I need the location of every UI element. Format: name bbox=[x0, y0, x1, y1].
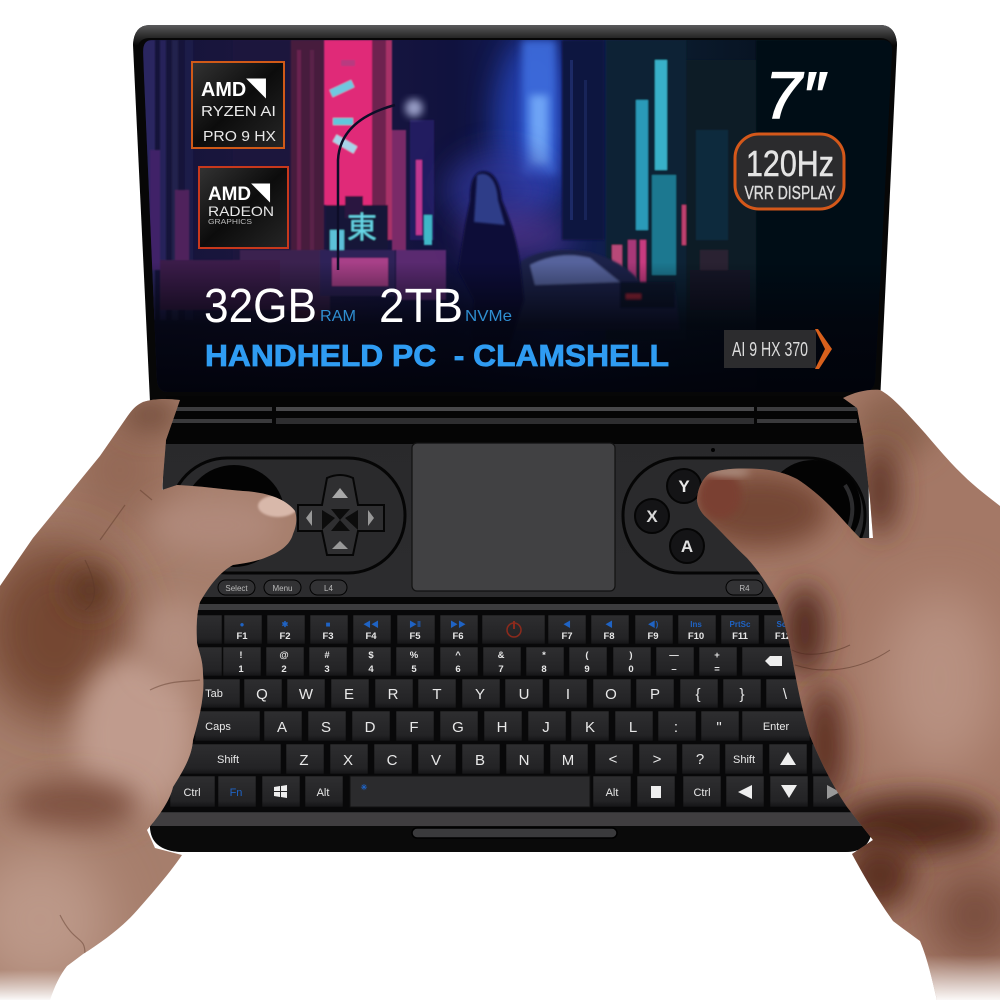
select button: Select bbox=[225, 584, 248, 593]
function key row: ● bbox=[240, 620, 245, 629]
function key row: Ins bbox=[690, 620, 702, 629]
mic holes bbox=[711, 448, 715, 452]
QWERTY key row: E bbox=[344, 686, 354, 703]
button Y: Y bbox=[678, 477, 690, 496]
number key row: 6 bbox=[455, 664, 461, 675]
AMD Ryzen AI badge: PRO 9 HX bbox=[203, 128, 276, 145]
QWERTY key row: T bbox=[432, 686, 442, 703]
ZXCV key row: Z bbox=[299, 752, 309, 769]
R4 button bbox=[726, 580, 763, 595]
screen: neon city scene bbox=[130, 30, 900, 402]
number key row: * bbox=[542, 650, 546, 661]
ASDF key row: Caps bbox=[205, 721, 231, 733]
ASDF key row: : bbox=[674, 719, 678, 736]
refresh rate badge: 120Hz bbox=[746, 143, 834, 184]
keyboard bbox=[170, 615, 851, 807]
pink neon sign tower: 東 bbox=[347, 203, 377, 247]
function key row: F2 bbox=[279, 631, 291, 642]
bottom key row: ✳ bbox=[361, 783, 368, 792]
QWERTY key row: \ bbox=[783, 686, 788, 703]
bottom key row bbox=[170, 776, 851, 807]
menu button bbox=[264, 580, 301, 595]
storage spec: NVMe bbox=[465, 308, 512, 325]
ASDF key row: F bbox=[409, 719, 419, 736]
right control area bbox=[623, 458, 865, 573]
bottom key row: Alt bbox=[606, 787, 618, 799]
bottom key row: Ctrl bbox=[693, 787, 711, 799]
QWERTY key row: U bbox=[519, 686, 529, 703]
ASDF key row: G bbox=[452, 719, 464, 736]
palm creases bbox=[792, 645, 890, 670]
menu button: Menu bbox=[272, 584, 293, 593]
number key row: @ bbox=[279, 650, 289, 661]
left buildings bbox=[143, 40, 330, 320]
QWERTY key row: O bbox=[605, 686, 617, 703]
ZXCV key row: B bbox=[475, 752, 485, 769]
screen size label: 7″ bbox=[765, 58, 828, 132]
function key row bbox=[190, 615, 802, 644]
ZXCV key row bbox=[178, 744, 842, 774]
number key row: ( bbox=[585, 650, 589, 661]
function key row: F11 bbox=[732, 631, 749, 642]
ZXCV key row: Shift bbox=[733, 754, 755, 766]
function key row: F9 bbox=[647, 631, 659, 642]
ZXCV key row: Shift bbox=[217, 754, 239, 766]
function key row: PrtSc bbox=[730, 620, 751, 629]
right cyan signs bbox=[606, 40, 800, 295]
AMD Radeon Graphics badge: GRAPHICS bbox=[208, 219, 252, 226]
QWERTY key row: W bbox=[299, 686, 314, 703]
QWERTY key row: R bbox=[388, 686, 399, 703]
button A bbox=[670, 529, 704, 563]
refresh rate badge: VRR DISPLAY bbox=[744, 183, 836, 203]
number key row: 8 bbox=[541, 664, 547, 675]
front lip bbox=[150, 597, 872, 852]
ASDF key row: Enter bbox=[763, 721, 789, 733]
ASDF key row bbox=[195, 711, 810, 741]
device lid bbox=[133, 25, 897, 402]
number key row: 9 bbox=[584, 664, 590, 675]
bottom key row: Fn bbox=[230, 787, 242, 799]
bottom key row: Alt bbox=[317, 787, 329, 799]
number key row: % bbox=[410, 650, 419, 661]
R4 button: R4 bbox=[739, 584, 750, 593]
function key row: F12 bbox=[775, 631, 791, 642]
headline: HANDHELD PC - CLAMSHELL bbox=[205, 338, 669, 373]
storage spec bbox=[379, 280, 512, 333]
ZXCV key row: C bbox=[387, 752, 398, 769]
number key row: — bbox=[669, 650, 679, 661]
ASDF key row: K bbox=[585, 719, 595, 736]
left control area bbox=[170, 458, 405, 573]
ZXCV key row: V bbox=[431, 752, 441, 769]
number key row: ) bbox=[629, 650, 633, 661]
central blue glow tower bbox=[495, 35, 575, 205]
processor tag: AI 9 HX 370 bbox=[732, 339, 808, 361]
AMD Ryzen AI badge bbox=[192, 62, 284, 148]
number key row: # bbox=[324, 650, 330, 661]
ZXCV key row: > bbox=[653, 751, 662, 768]
QWERTY key row: Tab bbox=[205, 688, 223, 700]
pink neon sign tower bbox=[320, 40, 446, 300]
button Y bbox=[667, 469, 701, 503]
thumbnail bbox=[258, 495, 298, 517]
number key row: 0 bbox=[628, 664, 634, 675]
right analog stick bbox=[765, 460, 861, 556]
street lamp bbox=[338, 105, 395, 270]
refresh rate badge bbox=[735, 134, 844, 209]
ZXCV key row: X bbox=[343, 752, 353, 769]
QWERTY key row: { bbox=[695, 686, 701, 703]
button A: A bbox=[681, 537, 693, 556]
ASDF key row: S bbox=[321, 719, 331, 736]
knuckle creases bbox=[60, 490, 200, 954]
number key row: ^ bbox=[455, 650, 461, 661]
function key row: F4 bbox=[365, 631, 377, 642]
car bbox=[520, 250, 674, 313]
function key row: ◀ bbox=[563, 620, 571, 629]
number key row bbox=[190, 647, 802, 676]
d-pad bbox=[298, 475, 384, 555]
AMD Ryzen AI badge: RYZEN AI bbox=[201, 103, 276, 120]
left wrist fade bbox=[0, 970, 80, 1000]
QWERTY key row: P bbox=[650, 686, 660, 703]
function key row: F8 bbox=[603, 631, 615, 642]
function key row: ◀◀ bbox=[363, 620, 379, 629]
select button bbox=[218, 580, 255, 595]
QWERTY key row: I bbox=[566, 686, 570, 703]
ZXCV key row: N bbox=[519, 752, 529, 769]
storage spec: 2TB bbox=[379, 280, 463, 333]
button X: X bbox=[646, 507, 658, 526]
number key row: 2 bbox=[281, 664, 287, 675]
number key row: 7 bbox=[498, 664, 504, 675]
number key row: 5 bbox=[411, 664, 417, 675]
number key row: ! bbox=[239, 650, 243, 661]
function key row: Scr bbox=[777, 620, 789, 629]
AMD Radeon Graphics badge bbox=[199, 167, 288, 248]
memory spec: 32GB bbox=[204, 280, 317, 333]
number key row: = bbox=[714, 664, 720, 675]
memory spec: RAM bbox=[320, 308, 356, 325]
processor tag bbox=[724, 329, 832, 369]
L4 button: L4 bbox=[324, 584, 333, 593]
number key row: – bbox=[671, 664, 677, 675]
button X bbox=[635, 499, 669, 533]
AMD Radeon Graphics badge: RADEON bbox=[208, 203, 274, 219]
ZXCV key row: < bbox=[609, 751, 618, 768]
ZXCV key row: M bbox=[562, 752, 574, 769]
function key row: ◀ bbox=[605, 620, 613, 629]
AMD Radeon Graphics badge: AMD◥ bbox=[208, 183, 270, 205]
ASDF key row: " bbox=[716, 719, 722, 736]
function key row: F1 bbox=[236, 631, 248, 642]
QWERTY key row: } bbox=[739, 686, 745, 703]
woman silhouette bbox=[458, 170, 524, 317]
function key row: ▶‖ bbox=[409, 620, 421, 629]
function key row: F7 bbox=[561, 631, 573, 642]
function key row: ■ bbox=[326, 620, 331, 629]
function key row: ✱ bbox=[282, 620, 289, 629]
L4 button bbox=[310, 580, 347, 595]
device base bbox=[150, 396, 872, 852]
ASDF key row: H bbox=[497, 719, 507, 736]
ASDF key row: J bbox=[542, 719, 550, 736]
left analog stick bbox=[183, 465, 285, 567]
function key row: ◀) bbox=[648, 620, 659, 629]
function key row: F6 bbox=[452, 631, 464, 642]
dark foreground bbox=[152, 266, 878, 392]
number key row: 4 bbox=[368, 664, 374, 675]
hinge bbox=[166, 396, 864, 444]
number key row: $ bbox=[368, 650, 374, 661]
bottom key row: Ctrl bbox=[183, 787, 201, 799]
function key row: F10 bbox=[688, 631, 704, 642]
ASDF key row: L bbox=[629, 719, 637, 736]
QWERTY key row bbox=[195, 679, 806, 708]
QWERTY key row: Y bbox=[475, 686, 485, 703]
left hand bbox=[0, 390, 310, 1000]
wrist fade bbox=[926, 958, 1000, 1000]
number key row: 3 bbox=[324, 664, 330, 675]
function key row: ▶▶ bbox=[450, 620, 466, 629]
ASDF key row: D bbox=[365, 719, 376, 736]
ZXCV key row: ? bbox=[696, 751, 704, 768]
function key row: F5 bbox=[409, 631, 421, 642]
QWERTY key row: Q bbox=[256, 686, 268, 703]
AMD Ryzen AI badge: AMD◥ bbox=[201, 78, 266, 101]
ASDF key row: A bbox=[277, 719, 287, 736]
touchpad bbox=[412, 443, 615, 591]
number key row: & bbox=[498, 650, 505, 661]
number key row: 1 bbox=[238, 664, 244, 675]
right hand bbox=[680, 380, 1000, 1000]
function key row: F3 bbox=[322, 631, 334, 642]
number key row: + bbox=[714, 650, 720, 661]
